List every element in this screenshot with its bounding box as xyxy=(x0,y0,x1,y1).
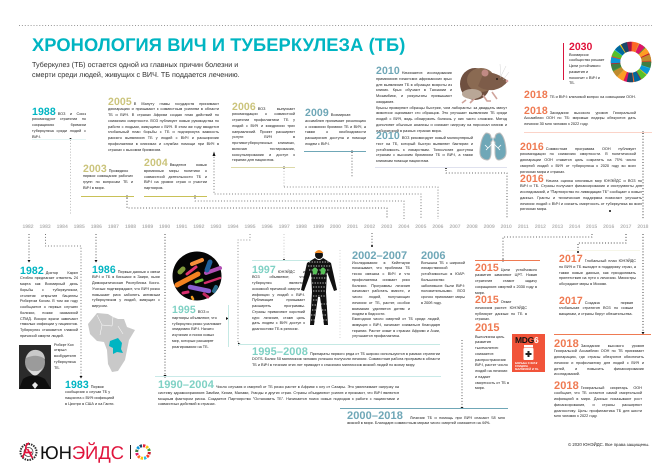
event 2004: 2004 Вводятся новые временные меры политики о совместной деятельности ТБ и ВИЧ на уровне стран и участии партнеров. xyxy=(144,157,207,190)
UN emblem xyxy=(20,442,38,461)
timeline years: 2013 xyxy=(552,224,563,230)
timeline years: 2015 xyxy=(586,224,597,230)
small SDG wheel xyxy=(135,444,151,460)
divider 2004 xyxy=(144,196,207,197)
timeline years: 2009 xyxy=(484,224,495,230)
event 1995: мер, которые расширят xyxy=(172,339,214,343)
divider 2018 xyxy=(524,132,652,133)
event 1988: 1988 ВОЗ и Союз рекомендуют стратегии по сокращению бремени туберкулеза среди людей с ВИЧ. xyxy=(32,106,86,138)
event 1997: 1997 ЮНЭЙДС и ВОЗ объявляют, что туберкулез является основной причиной смерти от инфекции у людей с ВИЧ. Публикация призывает расширять программы. Страны применяют короткий курс лечения, ставя цель дать людям с ВИЧ доступ к диагностике ТБ в регионе. xyxy=(252,264,305,331)
timeline years: 1989 xyxy=(142,224,153,230)
timeline years: 1986 xyxy=(91,224,102,230)
copyright: © 2020 ЮНЭЙДС. Все права защищены. xyxy=(568,442,649,447)
badge: MDG6 xyxy=(512,334,545,372)
divider 1997 xyxy=(252,260,316,261)
timeline years xyxy=(22,224,648,230)
event 2015 first: 2015 Цели устойчивого развития заменяют ЦРТ. Новая стратегия ставит задачу сокращения смертей к 2030 году в мире. xyxy=(475,262,537,294)
timeline years: 2004 xyxy=(398,224,409,230)
subtitle: смерти среди людей, живущих с ВИЧ. ТБ поддается лечению. xyxy=(32,70,240,79)
divider 1990-2004 xyxy=(155,376,441,377)
event 2015 second: 2015 Охват лечением растет: ЮНЭЙДС публикует данные по ТБ в странах. xyxy=(475,294,527,321)
timeline years: 1999 xyxy=(313,224,324,230)
timeline years: 2000 xyxy=(330,224,341,230)
event 2016 first: 2016 Совместная программа ООН публикует рекомендации по снижению смертности. В политической декларации ООН ставится цель сократить на 75% число смертей людей с ВИЧ от туберкулеза к 2020 году во всех регионах мира и странах. xyxy=(520,140,636,174)
event 2002-2007 xyxy=(352,250,440,338)
timeline years: 1982 xyxy=(22,224,34,230)
event 1995: изучение и поиск новых xyxy=(172,333,214,337)
divider 2010 xyxy=(375,167,507,168)
timeline years: 1992 xyxy=(193,224,204,230)
text 2002-2007: Исследование в Кейптауне показывает, что проблема ТБ тесно связана с ВИЧ и что профилактика снижает риск болезни. Программы лечения начинают работать вместе, и число людей, получающих лечение от ТБ, растет, особое внимание уделяется детям и людям в бедности. xyxy=(352,260,410,316)
event 2006 below xyxy=(421,250,465,305)
event 1982: 1982 Доктор Карел Стибло предлагает отметить 24 марта как Всемирный день борьбы с туберкулезом, столетие открытия бациллы Робертом Кохом. В том же году сообщается о первых случаях болезни, позже названной СПИД. Вскоре врачи замечают тяжелые инфекции у пациентов. Туберкулез становится главной причиной смерти людей. xyxy=(20,264,78,338)
event 2030 xyxy=(569,41,604,85)
year 2015: 2015 xyxy=(475,322,499,334)
timeline years: 1990 xyxy=(159,224,170,230)
timeline years: 2012 xyxy=(535,224,546,230)
icon: medicine bottle xyxy=(524,345,534,360)
logo: UNAIDS xyxy=(20,442,151,463)
divider 2003 xyxy=(81,196,134,197)
timeline years: 1985 xyxy=(74,224,85,230)
subtitle xyxy=(32,60,240,79)
divider 2000-2018 xyxy=(340,408,508,409)
timeline years: 1988 xyxy=(125,224,136,230)
bar 1995 xyxy=(228,305,229,347)
timeline years: 2005 xyxy=(415,224,426,230)
event 1995: 1995 ВОЗ и xyxy=(172,304,209,316)
year 2030: 2030 xyxy=(569,41,592,53)
badge caption: БОРЬБА С ВИЧ/СПИДОМ, МАЛЯРИЕЙ И ТБ xyxy=(515,361,538,371)
event 2018 fourth: 2018 Генеральный секретарь ООН сообщает, что ТБ остается самой смертельной инфекцией в мире. Данные показывают рост финансирования, и страны расширяют диагностику. Цель: профилактика ТБ для шести млн человек к 2022 году. xyxy=(554,380,642,418)
event 2005: 2005 В Мапуту главы государств принимают декларацию и призывают к совместным усилиям в области ТБ и ВИЧ. В странах Африки создан план действий по снижению смертности. ВОЗ публикует новые руководства по работе с людьми, живущими с ВИЧ. В этом же году вводится глобальный план борьбы с ТБ и подчеркнута важность раннего выявления ТБ у людей с ВИЧ и расширение профилактики в клиниках и службах помощи при ВИЧ в странах с высоким бременем. xyxy=(108,96,219,152)
timeline years: 1993 xyxy=(210,224,221,230)
event 1983: 1983 Первое xyxy=(65,378,104,390)
text 2030: Всемирное сообщество решает Цели устойчивого развития и покончит с ВИЧ и ТБ. xyxy=(569,52,604,85)
event 2015 third xyxy=(475,322,509,390)
timeline years: 1995 xyxy=(244,224,256,230)
event 1995: партнеры объявляют, что xyxy=(172,316,217,320)
timeline years: 2002 xyxy=(364,224,375,230)
text 2002-2007 continued: Ежегодное число смертей от ТБ среди людей, живущих с ВИЧ, начинает снижаться благодаря терапии. Растет охват в странах Африки и Азии, улучшается профилактика. xyxy=(352,317,440,338)
event 2010 lungs: 2010 ВОЗ рекомендует новый молекулярный тест на ТБ, который быстро выявляет бактерии и устойчивость к лекарствам. Технология доступна странам с высоким бременем ТБ и ВИЧ, а также клиникам помощи пациентам. xyxy=(376,130,473,163)
timeline years: 2016 xyxy=(603,224,614,230)
timeline years: 2018 xyxy=(637,224,648,230)
event 1986: 1986 Первые данные о связи ВИЧ и ТБ в Киншасе в Заире, ныне Демократическая Республика Конго. Ученые подтверждают, что ВИЧ резко повышает риск заболеть активным туберкулезом у людей, живущих с вирусом. xyxy=(92,264,160,308)
bar 2030 xyxy=(563,43,564,80)
timeline years: 2011 xyxy=(518,224,529,230)
event 2010 rat continued: Крысы проверяют образцы быстрее, чем лаборанты: за двадцать минут животное оценивает сто образцов. Это улучшает выявление ТБ среди людей с ВИЧ, ведь обнаружить болезнь у них часто сложнее. Метод дополняет обычные анализы и снижает нагрузку на персонал клиник и лабораторий в разных странах мира. xyxy=(376,106,507,132)
event 1983: в Центре в США и на Гаити. xyxy=(65,402,114,406)
event 2018 first: 2018 ТБ и ВИЧ: ключевой вопрос на совещании ООН. xyxy=(524,89,636,101)
badge title: MDG6 xyxy=(515,334,538,344)
event 1995: эпидемию ВИЧ. Начато xyxy=(172,327,214,331)
timeline years: 2003 xyxy=(381,224,392,230)
timeline years: 1994 xyxy=(227,224,239,230)
event 2018 third: 2018 Заседание высокого уровня Генеральной Ассамблеи ООН по ТБ принимает декларацию, где страны обязуются обеспечить лечение и профилактику для людей с ВИЧ и детей, и повысить финансирование исследований. xyxy=(554,338,644,376)
year 2006: 2006 xyxy=(421,250,445,262)
divider 2017 xyxy=(565,250,640,251)
event 1983: сообщение о случае ТБ у xyxy=(65,390,110,394)
event 1995 xyxy=(172,304,222,349)
timeline years: 1997 xyxy=(279,224,290,230)
event 1990-2004: 1990–2004 Число случаев и смертей от ТБ резко растет в Африке к югу от Сахары. Это увеличивает нагрузку на систему здравоохранения Замбии, Кении, Малави, Уганды и других стран. Страны объединяют усилия и признают, что ВИЧ является мощным фактором риска. Создается Партнерство "Остановить ТБ". Начинается поиск новых подходов к работе с пациентами и совместных действий в странах. xyxy=(158,379,399,406)
divider 2018 lower xyxy=(554,334,651,335)
divider 2015 xyxy=(475,260,540,261)
timeline years: 1987 xyxy=(108,224,119,230)
divider 1988 xyxy=(32,139,86,140)
year 2002-2007: 2002–2007 xyxy=(352,250,407,262)
event 2006: 2006 ВОЗ выпускает рекомендации о совместной стратегии профилактики ТБ у людей с ВИЧ и внедрении трех направлений. Проект расширяет услуги ВИЧ в противотуберкулезных клиниках, включая тестирование, консультирование и доступ к терапии для пациентов. xyxy=(232,100,295,162)
event 2009: 2009 Всемирная ассамблея принимает резолюцию о снижении бремени ТБ и ВИЧ, а также о необходимости расширения доступа и помощи людям с ВИЧ. xyxy=(305,107,366,146)
timeline years: 2007 xyxy=(449,224,461,230)
event 1995: реагирование на ТБ. xyxy=(172,344,209,348)
divider 2009 xyxy=(304,151,366,152)
wordmark: ЮНЭЙДС xyxy=(40,442,124,462)
timeline years: 1984 xyxy=(57,224,68,230)
timeline years: 2006 xyxy=(432,224,443,230)
separator xyxy=(130,445,131,459)
event 2003: 2003 Проведено первое совещание рабочих групп по вопросам ТБ и ВИЧ в мире. xyxy=(83,162,133,190)
event 1995-2008: 1995–2008 Препараты первого ряда от ТБ широко используются в рамках стратегии DOTS. Более 50 миллионов человек успешно получили лечение. Совместная работа программ в области ТБ и ВИЧ в течение этих лет приводит к спасению миллионов жизней людей по всему миру. xyxy=(252,346,440,367)
timeline years: 2014 xyxy=(569,224,580,230)
event 2017 second: 2017 Создана первая глобальная стратегия ВОЗ по новым вакцинам, и страны берут обязательства. xyxy=(559,294,633,316)
event 1983: пациента с ВИЧ-инфекцией xyxy=(65,396,114,400)
event 1983 xyxy=(65,378,114,406)
divider 1995-2008 xyxy=(238,344,440,345)
text 2006: Вспышка ТБ с широкой лекарственной устойчивостью в ЮАР: большинство заболевших были ВИЧ-положительными. ВОЗ срочно принимает меры в 2006 году. xyxy=(421,260,465,305)
event 1982 continued: Роберт Кох открыл возбудителя туберкулеза ТБ. xyxy=(54,342,76,370)
title: ХРОНОЛОГИЯ ВИЧ И ТУБЕРКУЛЕЗА (ТБ) xyxy=(32,34,405,55)
divider 2006 xyxy=(231,167,295,168)
timeline years: 2008 xyxy=(467,224,478,230)
timeline years: 1983 xyxy=(40,224,51,230)
timeline years: 1991 xyxy=(176,224,187,230)
timeline years: 2001 xyxy=(347,224,358,230)
event 2010 rat: 2010 Начинается исследование применения гигантских африканских крыс для выявления ТБ в образцах мокроты из клиник. Крыс обучают в Танзании и Мозамбике, и результаты превышают ожидания. xyxy=(376,65,452,104)
timeline years: 2017 xyxy=(620,224,631,230)
timeline years: 1998 xyxy=(296,224,307,230)
event 1995: туберкулез резко усиливает xyxy=(172,322,221,326)
event 2000-2018: 2000–2018 Лечение ТБ и помощь при ВИЧ спасают 58 млн жизней в мире. Благодаря совместным мерам число смертей снижается на 44%. xyxy=(347,410,505,425)
timeline years: 1996 xyxy=(262,224,273,230)
event 2016 second: 2016 Начата оценка ключевых мер ЮНЭЙДС и ВОЗ по ВИЧ и ТБ. Страны получают финансирование и инструменты для исследований, и "Партнерство по ликвидации ТБ" сообщает о новых данных. Гранты и техническая поддержка помогают улучшить лечение людей с ВИЧ и снизить смертность от туберкулеза во всех регионах мира. xyxy=(520,172,642,211)
timeline years: 2010 xyxy=(501,224,512,230)
event 2017 first: 2017 Глобальный план ЮНЭЙДС по ВИЧ и ТБ выходит в поддержку стран, а также новые данные, как преодолевать препятствия на пути к лечению. Министры обсуждают меры в Москве. xyxy=(559,253,636,286)
text 2015: Выполнена цель развития тысячелетия: снижается распространение ВИЧ, растет число людей на лечении и падает смертность от ТБ в мире. xyxy=(475,334,509,390)
subtitle: Туберкулез (ТБ) остается одной из главных причин болезни и xyxy=(32,60,238,69)
event 2018 second: 2018 Заседание высокого уровня Генеральной Ассамблеи ООН по ТБ: мировые лидеры обязуются дать лечение 30 млн человек к 2022 году. xyxy=(524,104,636,126)
